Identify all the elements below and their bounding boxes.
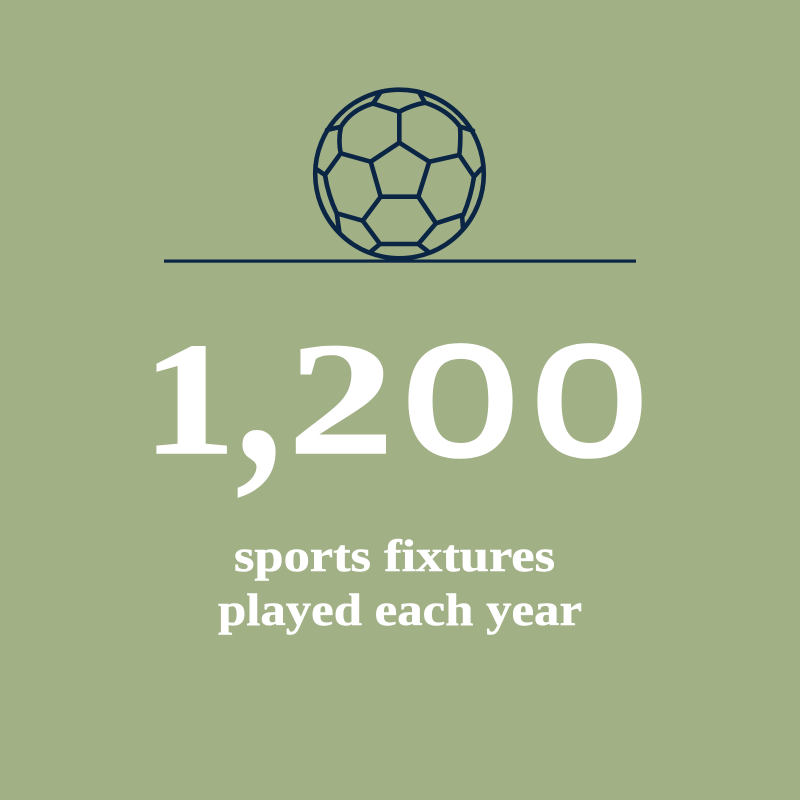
caption: sports fixtures played each year: played each year — [218, 584, 582, 635]
icon: football — [315, 90, 484, 258]
big number: 1,200: 1 — [142, 310, 236, 488]
caption: sports fixtures played each year — [218, 530, 582, 635]
caption: sports fixtures played each year: sports fixtures — [234, 530, 555, 581]
big number: 1,200: 0 — [532, 313, 647, 488]
big number: 1,200: 0 — [403, 313, 518, 488]
big number: 1,200: 2 — [288, 310, 394, 488]
big number: 1,200: , — [235, 263, 283, 513]
ground line — [164, 260, 636, 263]
big number: 1,200 — [142, 263, 647, 513]
